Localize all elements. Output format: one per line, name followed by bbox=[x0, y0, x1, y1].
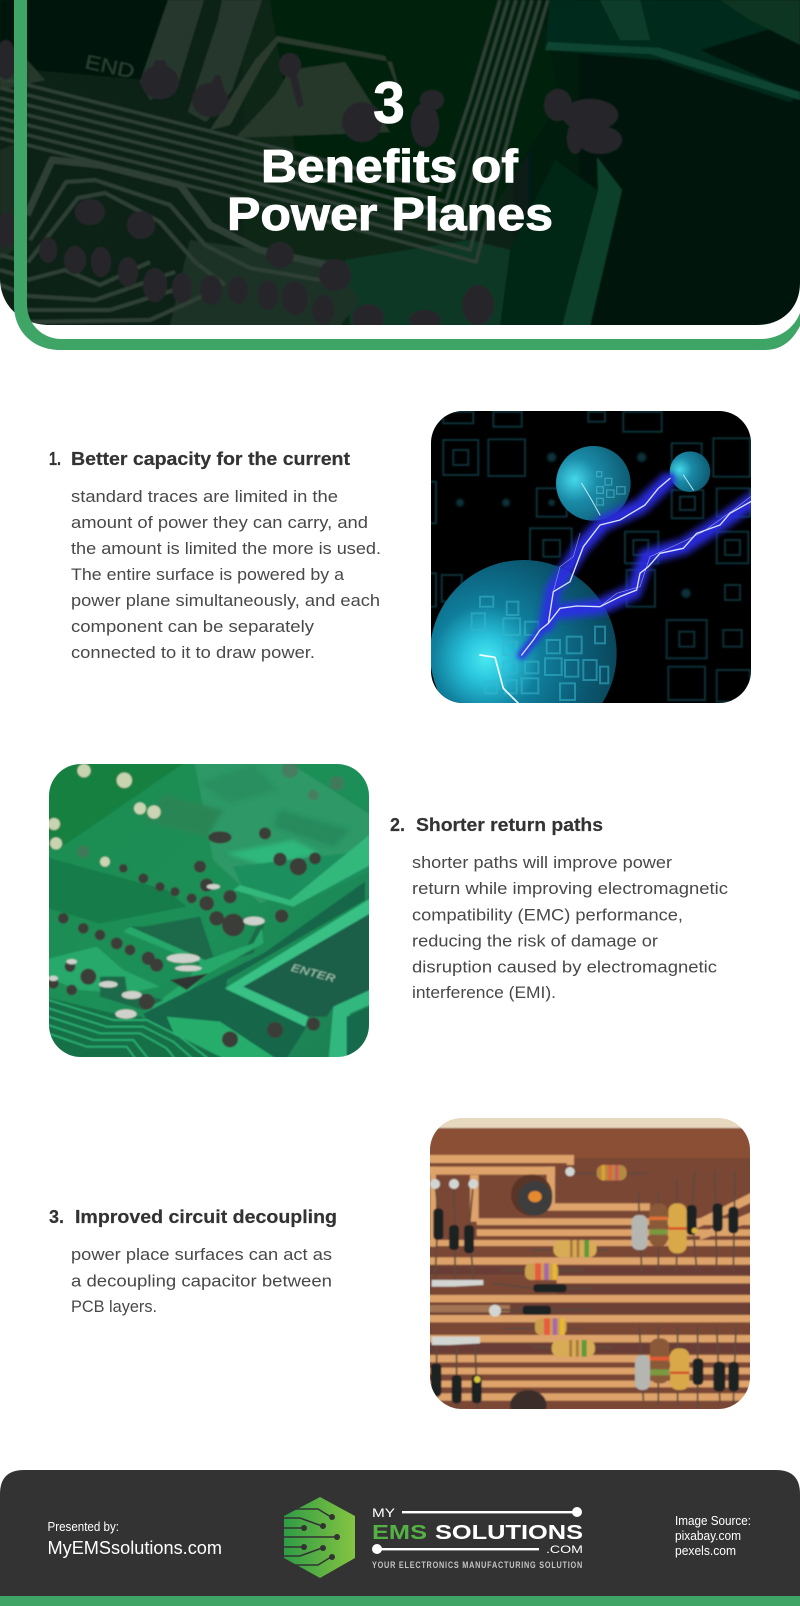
body: benefit 2: interference (EMI). bbox=[412, 983, 556, 1002]
body: benefit 1: power plane simultaneously, and each bbox=[71, 591, 380, 610]
body: benefit 1 bbox=[71, 487, 381, 662]
logo wordmark: .COM bbox=[546, 1544, 583, 1556]
text block: benefit 3 bbox=[49, 1206, 337, 1316]
title bbox=[227, 70, 553, 240]
heading: benefit 1: 1. bbox=[49, 448, 61, 469]
text block: benefit 1 bbox=[49, 448, 381, 662]
title: Benefits of bbox=[261, 140, 519, 192]
title: 3 bbox=[373, 70, 405, 136]
header photo: circuit board bbox=[0, 0, 800, 335]
presented by bbox=[48, 1520, 222, 1558]
image source: Image Source: bbox=[675, 1514, 751, 1528]
heading: benefit 3: 3. bbox=[49, 1206, 64, 1227]
body: benefit 1: connected to it to draw power. bbox=[71, 643, 315, 662]
body: benefit 1: the amount is limited the more is used. bbox=[71, 539, 381, 558]
body: benefit 2: shorter paths will improve power bbox=[412, 853, 672, 872]
resistors bbox=[435, 1172, 736, 1408]
sphere small bbox=[670, 451, 710, 492]
body: benefit 3: power place surfaces can act as bbox=[71, 1245, 332, 1264]
body: benefit 2: return while improving electromagnetic bbox=[412, 879, 729, 898]
image source: pexels.com bbox=[675, 1544, 736, 1558]
image: brown board with resistors bbox=[423, 1110, 757, 1420]
sphere medium bbox=[556, 446, 631, 521]
body: benefit 1: component can be separately bbox=[71, 617, 315, 636]
body: benefit 2: reducing the risk of damage or bbox=[412, 932, 658, 950]
body: benefit 3: a decoupling capacitor between bbox=[71, 1272, 332, 1290]
logo wordmark bbox=[372, 1506, 583, 1571]
logo wordmark: MY bbox=[372, 1506, 395, 1520]
body: benefit 3: PCB layers. bbox=[71, 1297, 157, 1316]
panel: header bbox=[0, 0, 800, 350]
logo wordmark: EMS bbox=[372, 1522, 427, 1544]
body: benefit 2: disruption caused by electromagnetic bbox=[412, 958, 718, 976]
heading: benefit 2: 2. bbox=[390, 814, 405, 835]
logo hexagon icon bbox=[284, 1497, 355, 1578]
body: benefit 3 bbox=[71, 1245, 332, 1316]
logo wordmark: SOLUTIONS bbox=[435, 1522, 583, 1544]
panel: footer bbox=[0, 1470, 800, 1606]
heading: benefit 3: Improved circuit decoupling bbox=[75, 1206, 337, 1227]
presented by: MyEMSsolutions.com bbox=[48, 1538, 222, 1558]
footer green strip bbox=[0, 1596, 800, 1606]
solder joints bbox=[48, 827, 321, 1047]
presented by: Presented by: bbox=[48, 1520, 119, 1534]
logo bbox=[284, 1497, 583, 1578]
inductor bbox=[511, 1174, 552, 1216]
body: benefit 2 bbox=[412, 853, 729, 1002]
image: green circuit board bbox=[43, 757, 377, 1065]
END silkscreen: END bbox=[83, 51, 136, 83]
image: green circuit board: ENTER bbox=[290, 962, 337, 985]
body: benefit 1: The entire surface is powered by a bbox=[71, 565, 345, 584]
text block: benefit 2 bbox=[390, 814, 729, 1002]
body: benefit 1: standard traces are limited in the bbox=[71, 487, 338, 506]
lightning bbox=[480, 475, 753, 703]
image source bbox=[675, 1514, 751, 1558]
image: glowing spheres with lightning bbox=[431, 411, 751, 703]
body: benefit 1: amount of power they can carry, and bbox=[71, 513, 368, 532]
heading: benefit 1: Better capacity for the current bbox=[71, 448, 350, 469]
body: benefit 2: compatibility (EMC) performance, bbox=[412, 906, 683, 924]
heading: benefit 2: Shorter return paths bbox=[416, 814, 603, 835]
title: Power Planes bbox=[227, 188, 553, 240]
green frame bbox=[14, 0, 800, 350]
image source: pixabay.com bbox=[675, 1529, 741, 1543]
sphere large bbox=[431, 560, 617, 703]
logo wordmark: YOUR ELECTRONICS MANUFACTURING SOLUTION bbox=[372, 1560, 583, 1571]
